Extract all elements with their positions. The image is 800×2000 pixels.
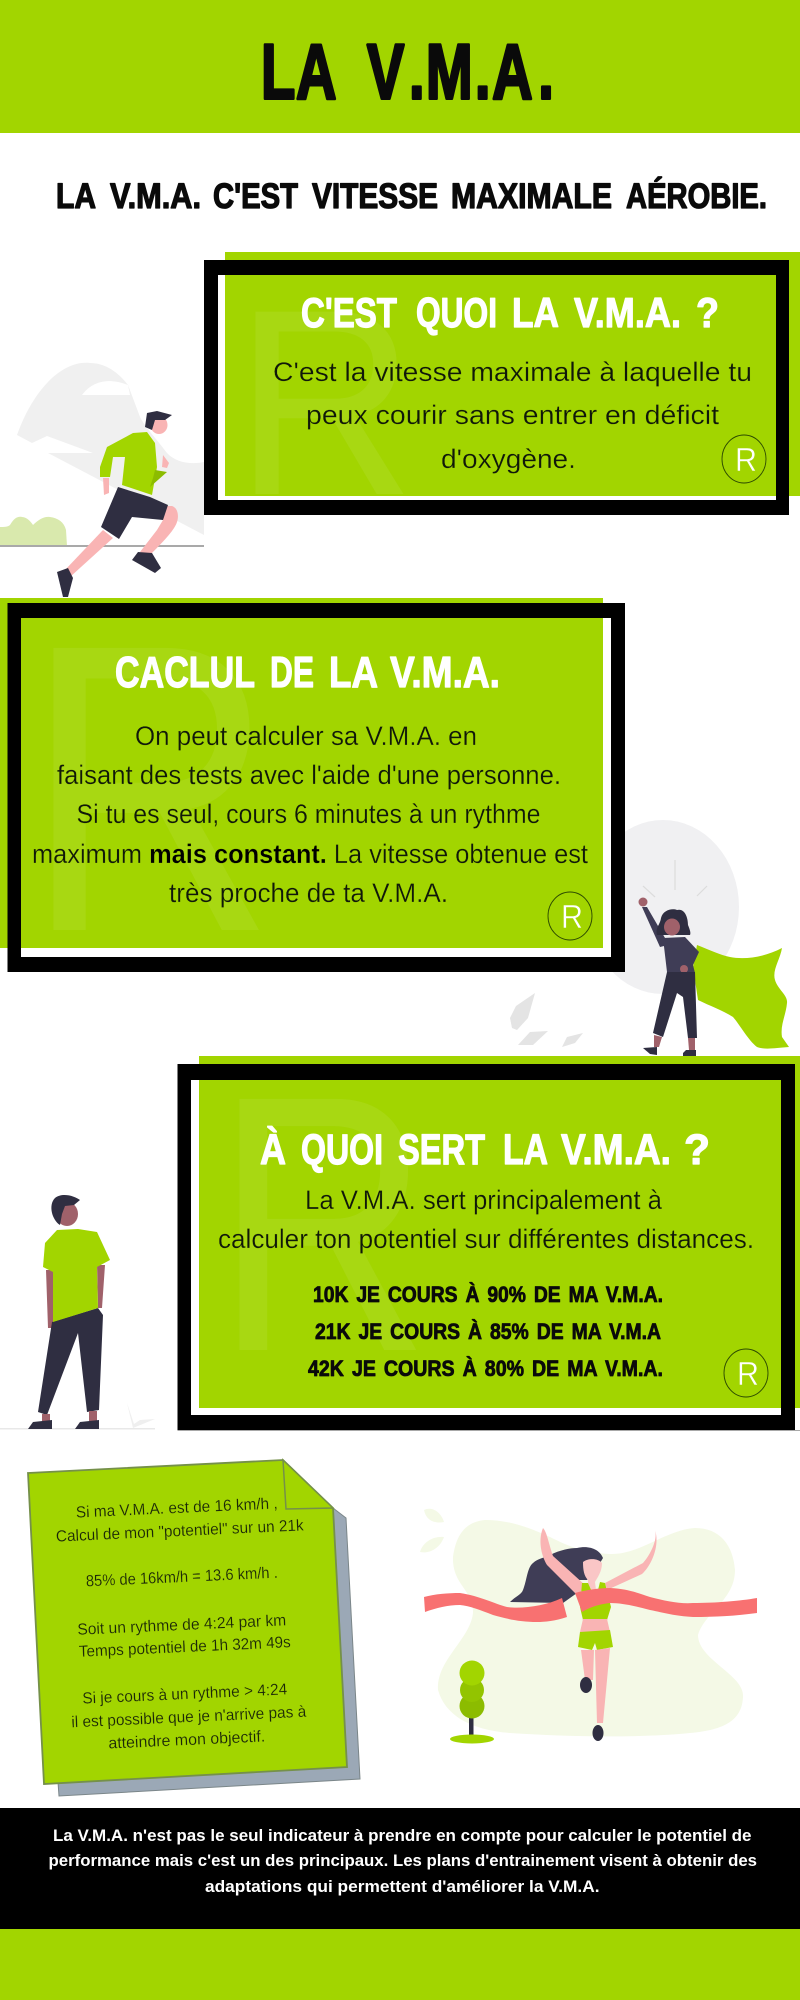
subtitle: [56, 176, 767, 216]
heading: QUOI: [416, 289, 497, 336]
heading: [301, 289, 719, 336]
neck and face: [583, 1559, 602, 1590]
illustration: runner: [0, 363, 204, 597]
body text: maximum mais constant. La vitesse obtenue est: [32, 839, 588, 869]
watermark R: R: [215, 1021, 430, 1428]
legs: [581, 1648, 610, 1723]
tree base: [450, 1734, 494, 1744]
pale blob: [438, 1520, 743, 1736]
hand: [638, 898, 648, 906]
panel: what VMA is for: [178, 1021, 800, 1431]
body text: très proche de ta V.M.A.: [169, 878, 448, 908]
bottom green band: [0, 1929, 800, 2000]
back leg: [65, 530, 113, 577]
body text: peux courir sans entrer en déficit: [306, 400, 720, 430]
fold: [283, 1460, 333, 1509]
cape: [693, 945, 789, 1049]
note text: 85% de 16km/h = 13.6 km/h .: [86, 1565, 278, 1590]
shoes: [643, 1047, 696, 1056]
face: [664, 918, 680, 936]
heading: [115, 648, 500, 697]
panel: calculating VMA: [0, 598, 625, 972]
front leg: [140, 506, 178, 555]
pace list: 42K JE COURS À 80% DE MA V.M.A.: [308, 1356, 663, 1381]
logo: [722, 435, 766, 483]
torso: [663, 937, 699, 973]
shirt: [43, 1229, 110, 1322]
heading: V.M.A.: [574, 289, 681, 336]
gray frame edge: [178, 1430, 800, 1431]
body text: calculer ton potentiel sur différentes distances.: [218, 1224, 754, 1254]
green backing: [199, 1056, 800, 1408]
leaves: [510, 993, 583, 1047]
hand on hip: [680, 965, 688, 973]
arms: [46, 1265, 105, 1328]
heading: V.M.A.: [561, 1126, 671, 1174]
hair: [51, 1195, 80, 1225]
logo: [548, 892, 592, 940]
subtitle: AÉROBIE.: [626, 176, 767, 216]
illustration: finishing woman: [420, 1509, 757, 1744]
logo: R: [561, 898, 583, 935]
front hand: [162, 455, 169, 468]
subtitle: LA: [56, 177, 96, 216]
footer text: [48, 1827, 757, 1896]
plant: [127, 1403, 155, 1428]
footer text: adaptations qui permettent d'améliorer la V.M.A.: [205, 1878, 600, 1896]
body text: [218, 1185, 754, 1254]
ribbon right: [575, 1588, 757, 1617]
green inner: [21, 618, 603, 948]
heading: QUOI: [301, 1126, 383, 1174]
mountain: [17, 363, 204, 535]
title: LAV.M.A.: [261, 28, 554, 116]
back hand: [103, 478, 109, 495]
back sheet: [58, 1508, 360, 1796]
body text: La V.M.A. sert principalement à: [305, 1185, 663, 1215]
subtitle: C'EST: [213, 177, 298, 216]
hair: [510, 1547, 603, 1603]
head: [150, 416, 168, 434]
illustration: superhero woman: [510, 860, 789, 1056]
heading: ?: [696, 289, 719, 336]
hair: [145, 411, 172, 430]
note text: Temps potentiel de 1h 32m 49s: [79, 1634, 291, 1661]
front sleeve: [150, 470, 167, 487]
body text: d'oxygène.: [441, 444, 576, 474]
note text: Si ma V.M.A. est de 16 km/h ,: [76, 1495, 278, 1522]
heading: V.M.A.: [390, 648, 500, 697]
watermark R: R: [235, 255, 415, 551]
ankles: [654, 1035, 695, 1050]
top: [580, 1582, 611, 1623]
ankles: [42, 1411, 97, 1421]
shoes: [580, 1677, 592, 1693]
footer text: performance mais c'est un des principaux. Les plans d'entrainement visent à obtenir des: [48, 1852, 757, 1870]
subtitle: VITESSE: [312, 177, 438, 216]
face: [56, 1202, 78, 1226]
green backing: [0, 598, 603, 948]
header band: [0, 0, 800, 133]
black frame: [178, 1064, 795, 1430]
footer text: La V.M.A. n'est pas le seul indicateur à prendre en compte pour calculer le potentiel de: [53, 1827, 752, 1845]
note text: Si je cours à un rythme > 4:24: [82, 1681, 288, 1708]
hair: [657, 909, 690, 935]
body text: faisant des tests avec l'aide d'une personne.: [57, 760, 561, 790]
body text: [273, 357, 752, 474]
note text: Soit un rythme de 4:24 par km: [77, 1612, 287, 1639]
gray sun: [587, 820, 739, 994]
pace list: [308, 1282, 663, 1381]
panel: what is VMA: [204, 252, 800, 515]
tree trunk: [469, 1716, 474, 1741]
front sheet: [28, 1460, 347, 1784]
green inner: [225, 275, 776, 496]
front shoe: [132, 552, 161, 573]
ground line: [0, 1428, 155, 1430]
logo: [724, 1349, 768, 1397]
note text: Calcul de mon "potentiel" sur un 21k: [56, 1517, 305, 1546]
white inner: [191, 1080, 781, 1415]
note text: atteindre mon objectif.: [108, 1728, 266, 1753]
heading: À: [260, 1126, 286, 1174]
heading: LA: [329, 648, 378, 697]
body text: On peut calculer sa V.M.A. en: [135, 721, 477, 751]
logo: R: [737, 1355, 759, 1392]
mountain snow: [82, 381, 130, 395]
black footer band: [0, 1808, 800, 1929]
heading: CACLUL: [115, 648, 255, 697]
pants: [38, 1308, 103, 1415]
back shoe: [57, 568, 73, 597]
heading: SERT: [398, 1126, 485, 1174]
tree foliage: [460, 1660, 484, 1718]
green backing: [225, 252, 800, 496]
sweat drops: [420, 1509, 444, 1552]
ground line: [0, 545, 204, 547]
right arm: [605, 1530, 657, 1590]
white inner: [218, 275, 776, 500]
rays: [643, 860, 707, 897]
note text: [56, 1495, 307, 1753]
heading: LA: [503, 1126, 548, 1174]
black frame: [8, 603, 625, 972]
note text: il est possible que je n'arrive pas à: [71, 1704, 307, 1731]
shorts: [101, 487, 168, 539]
left arm: [540, 1528, 585, 1596]
heading: LA: [512, 289, 559, 336]
shorts: [578, 1630, 613, 1650]
black frame: [204, 260, 789, 515]
body text: C'est la vitesse maximale à laquelle tu: [273, 357, 752, 387]
torso hoodie: [100, 432, 157, 495]
heading: [260, 1126, 710, 1174]
subtitle: V.M.A.: [110, 177, 201, 216]
illustration: standing man: [0, 1195, 155, 1430]
legs: [653, 972, 697, 1038]
subtitle: MAXIMALE: [451, 177, 612, 216]
pace list: 21K JE COURS À 85% DE MA V.M.A: [315, 1319, 661, 1344]
heading: ?: [684, 1126, 710, 1174]
bush: [0, 517, 67, 546]
green inner: [199, 1080, 781, 1408]
white inner: [21, 618, 611, 957]
pace list: 10K JE COURS À 90% DE MA V.M.A.: [313, 1282, 663, 1307]
body text: Si tu es seul, cours 6 minutes à un rythme: [76, 799, 540, 829]
watermark R: R: [25, 559, 275, 1017]
body text: [32, 721, 588, 908]
heading: DE: [270, 648, 314, 697]
logo: R: [735, 441, 757, 478]
shoes: [28, 1420, 99, 1429]
note card: [28, 1460, 360, 1796]
raised arm: [642, 907, 668, 947]
ribbon left: [424, 1593, 567, 1622]
midriff: [580, 1619, 610, 1632]
heading: C'EST: [301, 289, 397, 336]
